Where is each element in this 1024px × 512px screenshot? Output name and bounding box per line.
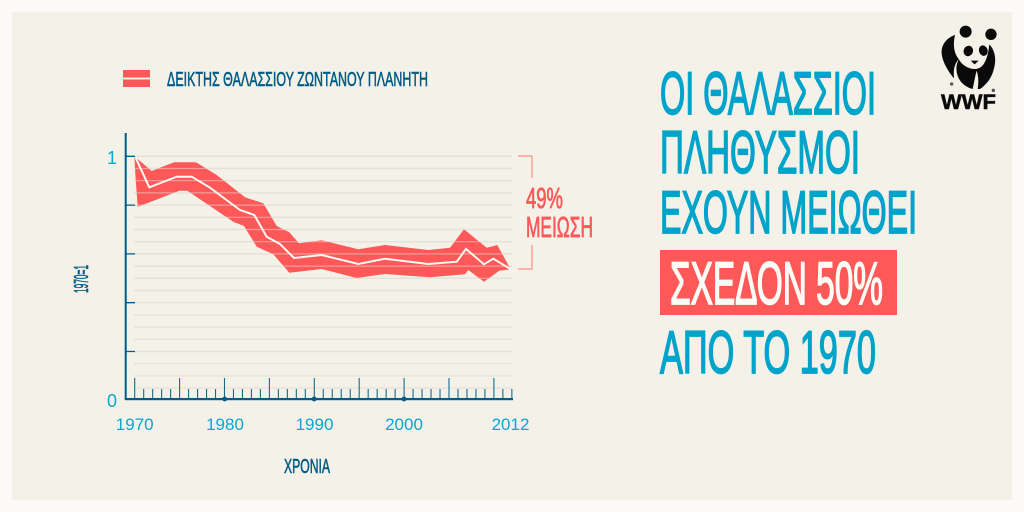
index line (135, 156, 511, 269)
x axis years (116, 415, 529, 434)
bracket and 49% decrease callout: ΜΕΙΩΣΗ (526, 212, 593, 244)
headline (660, 60, 917, 386)
legend: marine living planet index: ΔΕΙΚΤΗΣ ΘΑΛΑΣΣΙΟΥ ΖΩΝΤΑΝΟΥ ΠΛΑΝΗΤΗ (167, 69, 428, 91)
x axis years: 1970 (116, 415, 154, 434)
y axis values (107, 148, 117, 411)
highlight: almost 50% (660, 250, 897, 317)
bracket and 49% decrease callout: 49% (526, 183, 563, 215)
headline: ΠΛΗΘΥΣΜΟΙ (660, 119, 860, 186)
WWF panda logo: WWF (941, 91, 996, 114)
WWF panda logo (941, 26, 997, 114)
y axis (126, 156, 135, 352)
bracket and 49% decrease callout (518, 156, 593, 269)
legend: marine living planet index (123, 69, 428, 91)
line chart: index 1970 to 2012 (125, 133, 513, 401)
confidence band (134, 156, 511, 282)
y axis values: 1 (107, 148, 117, 168)
x axis (125, 398, 513, 400)
x axis years: 1980 (206, 415, 244, 434)
x axis years: 2000 (385, 415, 423, 434)
x axis years: 1990 (296, 415, 333, 434)
text: 1970=1 (71, 265, 93, 293)
y axis values: 0 (107, 391, 117, 411)
x axis title: ΧΡΟΝΙΑ (284, 456, 330, 478)
x axis years: 2012 (492, 415, 529, 434)
